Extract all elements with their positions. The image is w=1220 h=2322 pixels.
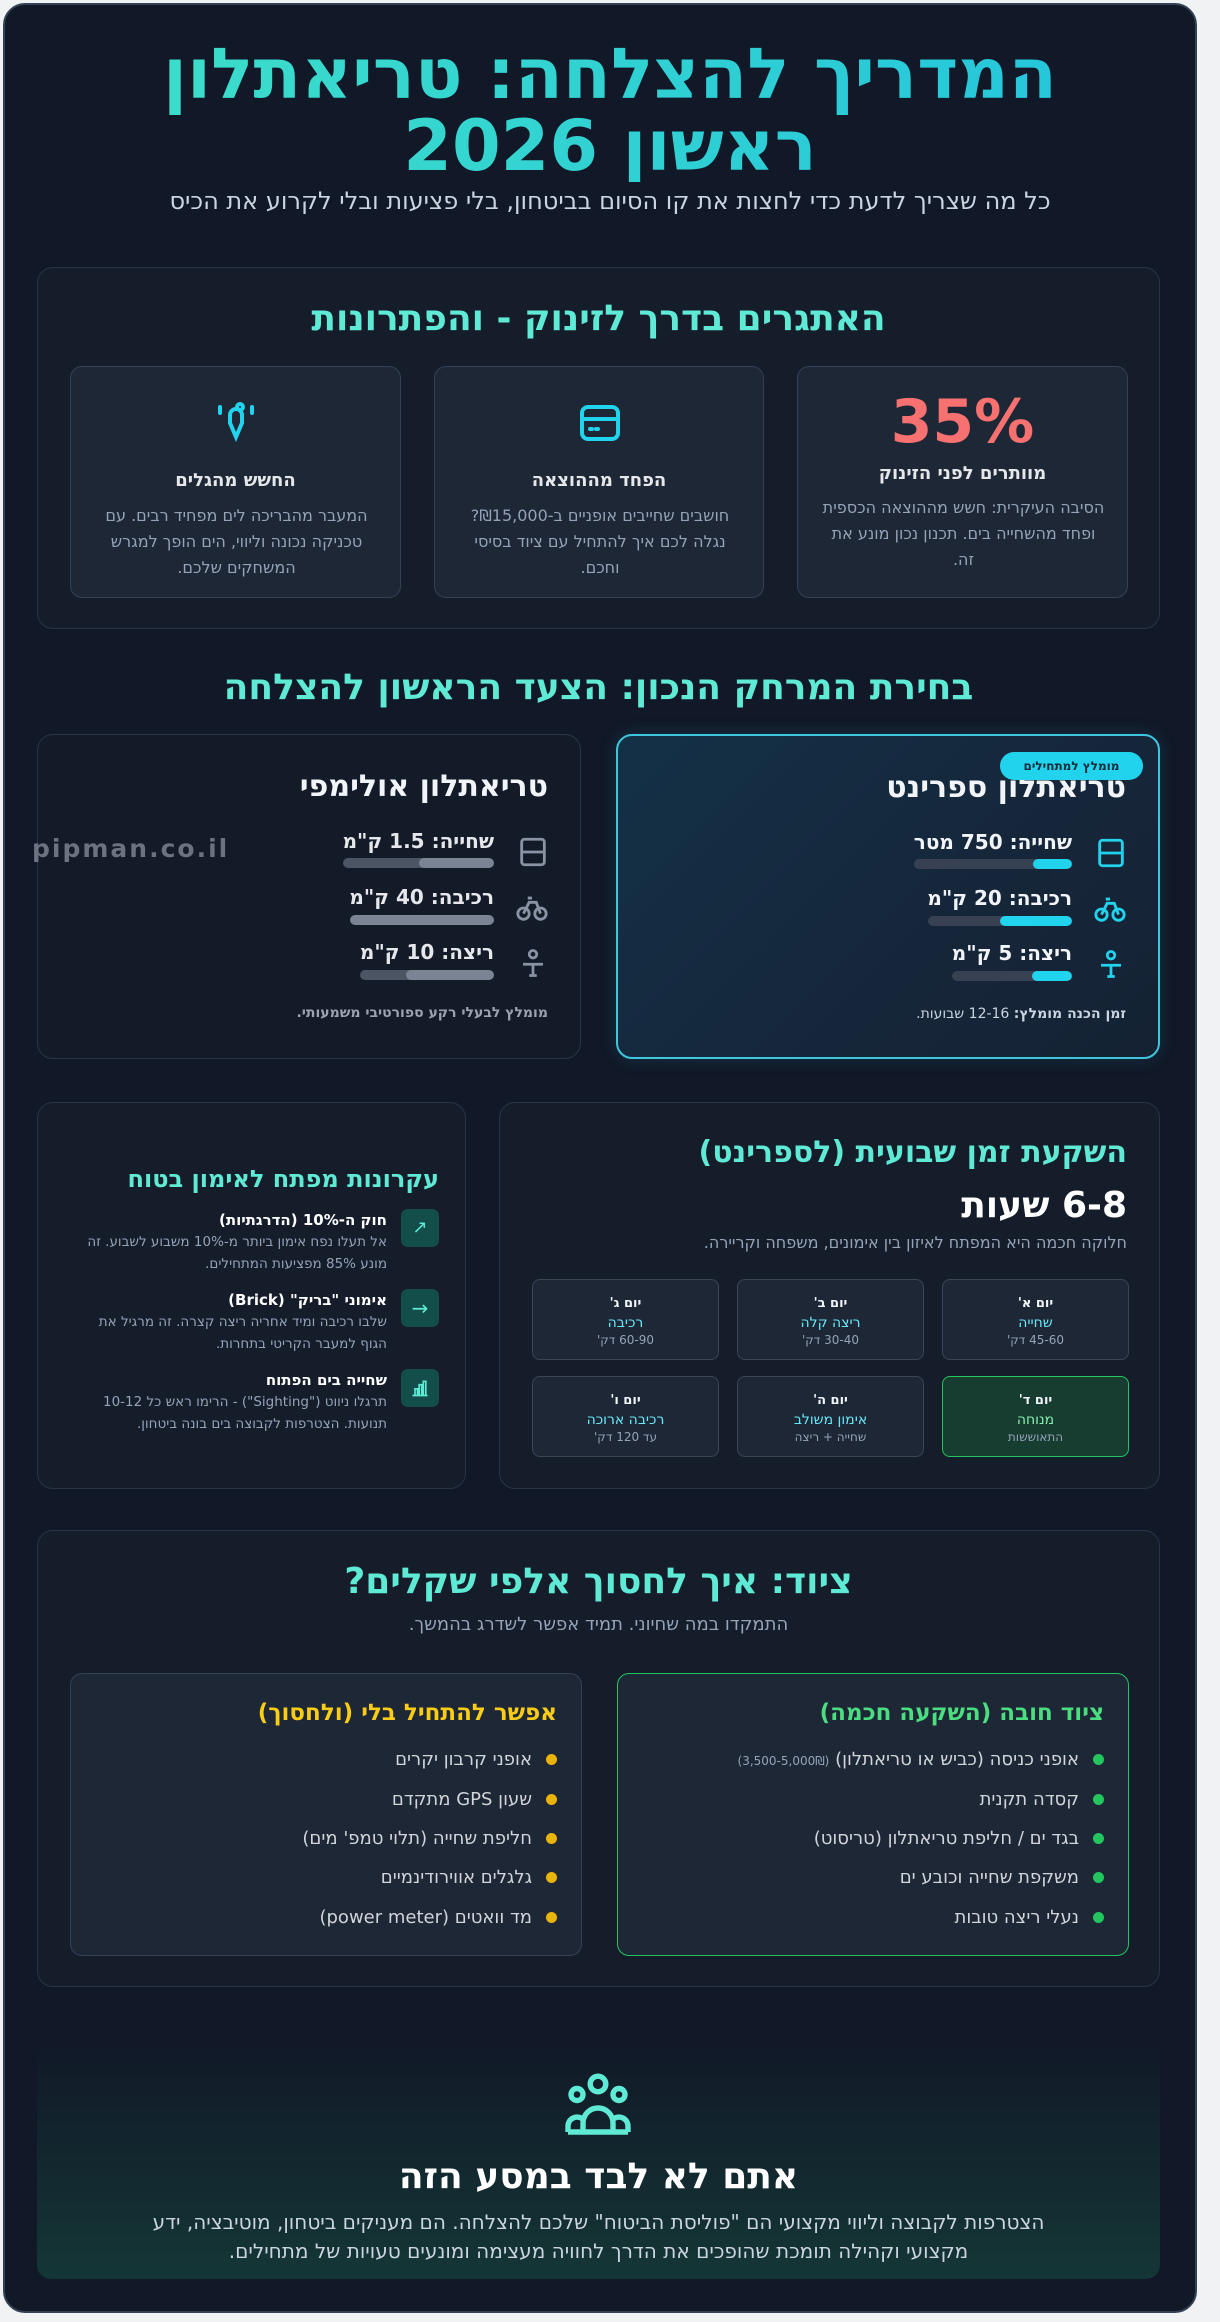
watermark: pipman.co.il: [32, 834, 229, 863]
day grid: יום ד': [1019, 1393, 1052, 1408]
day grid: 30-40 דק': [802, 1333, 859, 1347]
box: optional: אופני קרבון יקרים: [395, 1749, 532, 1770]
box: optional: אפשר להתחיל בלי (ולחסוך): [258, 1700, 557, 1726]
card: 35%: הסיבה העיקרית: חשש מההוצאה הכספית ופחד מהשחייה בים. תכנון נכון מונע את זה.: [823, 498, 1104, 569]
day grid: יום ב': [814, 1296, 847, 1311]
row: swim: שחייה: 750 מטר: [914, 830, 1072, 854]
box: optional: חליפת שחייה (תלוי טמפ' מים): [302, 1828, 532, 1849]
box: optional: מד וואטים (power meter): [319, 1907, 532, 1928]
row: bike: [927, 886, 1126, 926]
panel: challenges: [37, 267, 1160, 629]
row: run: [952, 941, 1121, 981]
item: brick: →: [412, 1296, 428, 1320]
day grid: 60-90 דק': [597, 1333, 654, 1347]
row: bike: [349, 885, 548, 925]
item: brick: [98, 1289, 439, 1352]
badge: [1000, 752, 1143, 780]
item: open water: שחייה בים הפתוח: [266, 1371, 387, 1389]
item: open water: תרגלו ניווט ("Sighting") - הרימו ראש כל 10-12 תנועות. הצטרפות לקבוצה בים בונה ביטחון.: [103, 1394, 387, 1432]
row: bike: רכיבה: 20 ק"מ: [927, 886, 1072, 910]
row: swim: [343, 829, 546, 868]
day grid: 45-60 דק': [1007, 1333, 1064, 1347]
title: המדריך להצלחה: טריאתלון: [163, 33, 1057, 115]
card: cost: הפחד מההוצאה: [532, 470, 666, 491]
badge: מומלץ למתחילים: [1024, 759, 1119, 773]
title: טריאתלון ספרינט: [886, 770, 1126, 805]
row: bike: רכיבה: 40 ק"מ: [349, 885, 494, 909]
panel: weekly time: [499, 1102, 1160, 1489]
day grid: יום ה': [813, 1393, 848, 1408]
box: must have: קסדה תקנית: [980, 1789, 1079, 1810]
item: 10%: [87, 1209, 439, 1272]
panel: equipment: [37, 1530, 1160, 1987]
row: run: ריצה: 5 ק"מ: [952, 941, 1072, 965]
day grid: רכיבה ארוכה: [587, 1412, 664, 1428]
heading: השקעת זמן שבועית (לספרינט): [699, 1135, 1127, 1170]
day grid: שחייה + ריצה: [795, 1430, 866, 1444]
day grid: שחייה: [1018, 1315, 1053, 1331]
box: must have: משקפת שחייה וכובע ים: [900, 1867, 1079, 1888]
heading: אתם לא לבד במסע הזה: [399, 2156, 798, 2197]
item: brick: אימוני "בריק" (Brick): [228, 1291, 387, 1309]
subtitle: כל מה שצריך לדעת כדי לחצות את קו הסיום בביטחון, בלי פציעות ובלי לקרוע את הכיס: [169, 187, 1051, 215]
day grid: התאוששות: [1008, 1430, 1063, 1444]
box: must have: אופני כניסה (כביש או טריאתלון) (3,500-5,000₪): [738, 1749, 1079, 1770]
footnote: מומלץ לבעלי רקע ספורטיבי משמעותי.: [296, 1005, 548, 1021]
heading: עקרונות מפתח לאימון בטוח: [127, 1165, 439, 1193]
card: waves: [70, 366, 401, 598]
icon: swimmer: [218, 402, 254, 442]
stat: 35%: [891, 387, 1034, 457]
row: swim: שחייה: 1.5 ק"מ: [343, 829, 494, 853]
box: optional: [70, 1673, 582, 1956]
day grid: עד 120 דק': [594, 1430, 657, 1444]
title: [20, 38, 1200, 182]
card: 35%: [797, 366, 1128, 598]
day grid: [532, 1279, 1129, 1457]
box: must have: בגד ים / חליפת טריאתלון (טריסוט): [814, 1828, 1079, 1849]
panel: sprint: [616, 734, 1160, 1059]
day grid: יום א': [1018, 1296, 1053, 1311]
row: run: ריצה: 10 ק"מ: [360, 940, 494, 964]
item: brick: שלבו רכיבה ומיד אחריה ריצה קצרה. זה מרגיל את הגוף למעבר הקריטי בתחרות.: [99, 1314, 387, 1352]
day grid: ריצה קלה: [800, 1315, 860, 1331]
card: cost: חושבים שחייבים אופניים ב-₪15,000? נגלה לכם איך להתחיל עם ציוד בסיסי וחכם.: [471, 506, 729, 577]
panel: olympic: [37, 734, 581, 1059]
day grid: מנוחה: [1017, 1412, 1054, 1428]
footer: community: [37, 2038, 1160, 2279]
item: 10%: ↗: [412, 1217, 428, 1238]
card: 35%: מוותרים לפני הזינוק: [879, 463, 1046, 484]
hours: 6-8 שעות: [961, 1185, 1127, 1226]
row: run: [360, 940, 543, 980]
card: waves: החשש מהגלים: [175, 470, 296, 491]
heading: challenges: האתגרים בדרך לזינוק - והפתרונות: [311, 298, 886, 339]
desc: חלוקה חכמה היא המפתח לאיזון בין אימונים, משפחה וקריירה.: [704, 1233, 1127, 1252]
card: waves: המעבר מהבריכה לים מפחיד רבים. עם טכניקה נכונה וליווי, הים הופך למגרש המשחקים שלכם.: [105, 506, 368, 577]
card: cost: [434, 366, 764, 598]
title: ראשון 2026: [403, 105, 817, 187]
panel: principles: [37, 1102, 466, 1489]
text: הצטרפות לקבוצה וליווי מקצועי הם "פוליסת הביטוח" שלכם להצלחה. הם מעניקים ביטחון, מוטיבציה, ידע מקצועי וקהילה תומכת שהופכים את הדרך לחוויה מעצימה ומונעים טעויות של מתחילים.: [153, 2210, 1044, 2263]
day grid: יום ג': [610, 1296, 641, 1311]
box: must have: [617, 1673, 1129, 1956]
item: open water: [103, 1369, 439, 1432]
heading: distance: בחירת המרחק הנכון: הצעד הראשון להצלחה: [224, 667, 973, 708]
icon: people: [565, 2074, 631, 2135]
day grid: רכיבה: [608, 1315, 643, 1331]
heading: ציוד: איך לחסוך אלפי שקלים?: [344, 1561, 853, 1602]
day grid: יום ו': [610, 1393, 641, 1408]
row: swim: [914, 830, 1124, 869]
box: optional: שעון GPS מתקדם: [392, 1789, 532, 1810]
title: טריאתלון אולימפי: [300, 769, 548, 804]
box: must have: ציוד חובה (השקעה חכמה): [820, 1700, 1104, 1726]
box: optional: גלגלים אווירודינמיים: [381, 1867, 532, 1888]
footnote: זמן הכנה מומלץ: 12-16 שבועות.: [916, 1006, 1126, 1022]
subheading: התמקדו במה שחיוני. תמיד אפשר לשדרג בהמשך.: [409, 1614, 788, 1635]
box: must have: נעלי ריצה טובות: [954, 1907, 1079, 1928]
icon: card: [580, 405, 620, 441]
item: 10%: אל תעלו נפח אימון ביותר מ-10% משבוע לשבוע. זה מונע 85% מפציעות המתחילים.: [87, 1234, 387, 1272]
item: 10%: חוק ה-10% (הדרגתיות): [219, 1211, 387, 1229]
day grid: אימון משולב: [794, 1412, 867, 1428]
